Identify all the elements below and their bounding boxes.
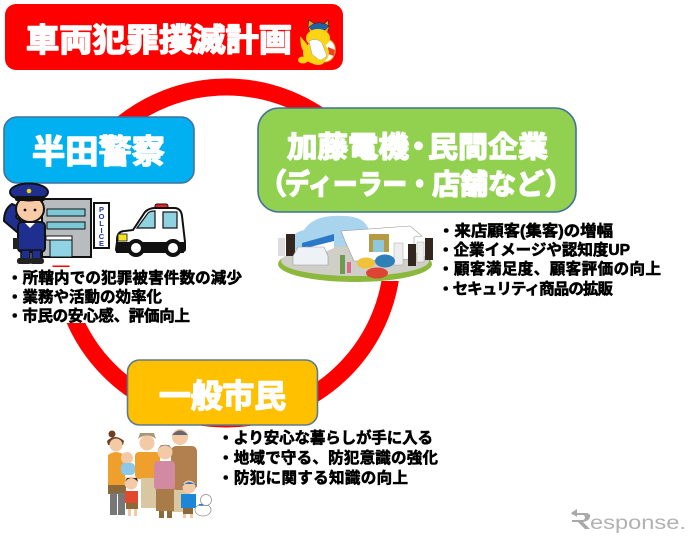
heading: companies box: 加藤電機 (287, 131, 409, 164)
heading: companies box: ・ (404, 132, 433, 164)
icon: patrol car (115, 204, 186, 255)
text block: company benefits: ・顧客満足度、顧客評価の向上 (438, 259, 661, 278)
icon: police building: C (99, 232, 105, 241)
text block: citizen benefits (218, 428, 438, 487)
icon: dealership scene (278, 216, 433, 282)
heading: police box: 半田警察 (32, 133, 165, 170)
title text: 車両犯罪撲滅計画 (26, 22, 292, 58)
heading: citizens box (128, 360, 318, 425)
white mask behind police text (0, 267, 250, 323)
icon: police building: L (99, 219, 104, 228)
text block: police benefits: ・所轄内での犯罪被害件数の減少 (7, 268, 242, 287)
heading: companies box: （ (258, 169, 287, 201)
icon: police building: E (99, 239, 104, 248)
icon: police building (42, 199, 109, 257)
panel: citizens (107, 360, 438, 518)
text block: citizen benefits: ・地域で守る、防犯意識の強化 (218, 448, 438, 467)
text block: police benefits: ・市民の安心感、評価向上 (7, 306, 190, 325)
icon: family (107, 429, 212, 518)
heading: companies box: ） (545, 169, 574, 201)
white mask behind dealership illustration (270, 212, 440, 281)
text block: company benefits (438, 221, 661, 298)
title banner (5, 4, 343, 70)
logo: Response watermark (571, 509, 686, 534)
icon: police officer (4, 184, 48, 264)
panel: companies (258, 108, 661, 298)
heading: companies box: 店舗など (432, 169, 544, 200)
text block: police benefits (7, 268, 242, 325)
heading: companies box: ディーラー・ (285, 168, 432, 200)
heading: companies box: 民間企業 (428, 131, 548, 164)
icon: police building: O (99, 212, 105, 221)
text block: citizen benefits: ・より安心な暮らしが手に入る (218, 428, 433, 447)
heading: police box (4, 117, 194, 183)
icon: police building: I (100, 226, 103, 235)
text block: company benefits: ・企業イメージや認知度UP (438, 240, 630, 259)
panel: police (0, 117, 250, 325)
logo: Response watermark: esponse. (590, 513, 686, 534)
white mask behind police illustration (0, 183, 195, 266)
text block: company benefits: ・来店顧客(集客)の増幅 (438, 221, 613, 240)
text block: police benefits: ・業務や活動の効率化 (7, 288, 162, 306)
heading: companies box (258, 108, 576, 212)
icon: mascot (298, 20, 335, 65)
red cycle ring (60, 87, 392, 419)
text block: company benefits: ・セキュリティ商品の拡販 (438, 280, 613, 298)
icon: police building: P (99, 205, 104, 214)
text block: citizen benefits: ・防犯に関する知識の向上 (218, 468, 408, 487)
heading: citizens box: 一般市民 (159, 378, 286, 414)
